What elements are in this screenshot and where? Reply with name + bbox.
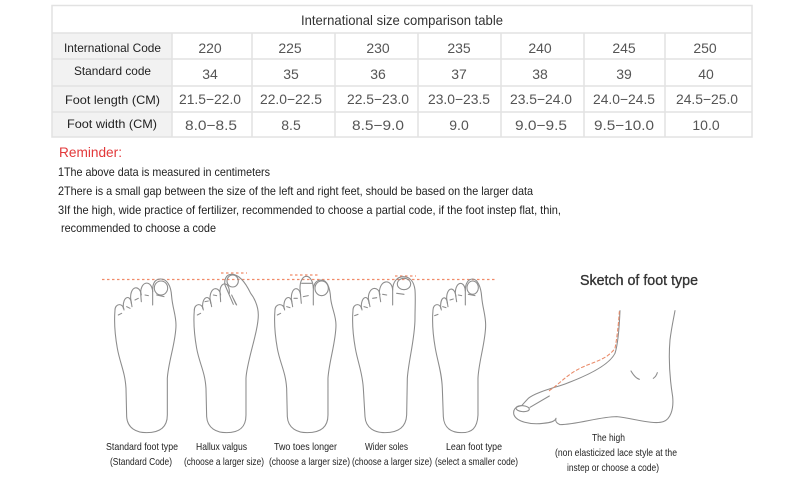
row: standard code: 34 bbox=[202, 66, 218, 82]
reminder text block: 2There is a small gap between the size of the left and right feet, should be based on the larger data bbox=[58, 184, 533, 198]
foot type captions: (Standard Code) bbox=[110, 456, 172, 468]
row: foot width bbox=[67, 117, 720, 133]
row: international code: 230 bbox=[366, 40, 390, 56]
foot type captions: Hallux valgus bbox=[196, 441, 247, 453]
row: international code bbox=[64, 40, 717, 56]
sketch heading: Sketch of foot type bbox=[580, 272, 698, 289]
row: foot width: 8.5−9.0 bbox=[352, 117, 404, 133]
sketch caption: The high bbox=[592, 432, 625, 444]
icon: standard foot bbox=[115, 279, 176, 433]
row: foot width: 8.5 bbox=[281, 117, 301, 133]
foot type captions: Lean foot type bbox=[446, 441, 502, 453]
row: foot length: 23.0−23.5 bbox=[428, 91, 490, 107]
reminder text block: 3If the high, wide practice of fertilizer, recommended to choose a partial code, if the foot instep flat, thin, bbox=[58, 203, 561, 217]
reminder text block: recommended to choose a code bbox=[61, 221, 216, 235]
row: foot length: 24.5−25.0 bbox=[676, 91, 738, 107]
row: standard code bbox=[74, 64, 714, 82]
icon: side view of high instep foot bbox=[514, 311, 675, 425]
sketch caption: instep or choose a code) bbox=[567, 462, 659, 474]
row: standard code: 38 bbox=[532, 66, 548, 82]
reference dashed line: toe length bbox=[102, 273, 495, 280]
row: foot length: Foot length (CM) bbox=[65, 93, 160, 107]
sketch caption: (non elasticized lace style at the bbox=[555, 447, 677, 459]
row: foot width: 9.0 bbox=[449, 117, 469, 133]
icon: two toes longer foot bbox=[275, 276, 336, 433]
row: international code: 250 bbox=[693, 40, 717, 56]
sketch caption bbox=[555, 432, 677, 474]
row: international code: 220 bbox=[198, 40, 222, 56]
row: international code: 225 bbox=[278, 40, 302, 56]
row: foot width: 9.5−10.0 bbox=[594, 117, 654, 133]
row: foot length: 22.0−22.5 bbox=[260, 91, 322, 107]
icon: hallux valgus foot bbox=[194, 274, 258, 433]
icon: lean foot bbox=[433, 279, 486, 433]
row: foot length: 21.5−22.0 bbox=[179, 91, 241, 107]
row: foot length bbox=[65, 91, 738, 107]
row: international code: International Code bbox=[64, 41, 161, 55]
row: international code: 235 bbox=[447, 40, 471, 56]
row: standard code: 35 bbox=[283, 66, 299, 82]
icon: wider soles foot bbox=[353, 277, 415, 433]
reminder text block: 1The above data is measured in centimeters bbox=[58, 165, 270, 179]
foot type captions: Standard foot type bbox=[106, 441, 178, 453]
row: standard code: 39 bbox=[616, 66, 632, 82]
row: standard code: Standard code bbox=[74, 64, 151, 78]
foot type captions: (choose a larger size) bbox=[269, 456, 350, 468]
row: foot width: 10.0 bbox=[692, 117, 720, 133]
foot type captions: (select a smaller code) bbox=[435, 456, 518, 468]
table title: International size comparison table bbox=[301, 12, 503, 28]
row: foot length: 24.0−24.5 bbox=[593, 91, 655, 107]
row: standard code: 37 bbox=[451, 66, 467, 82]
dashed instep line bbox=[549, 312, 619, 391]
foot type captions bbox=[106, 441, 518, 468]
row: standard code: 36 bbox=[370, 66, 386, 82]
foot type captions: Two toes longer bbox=[274, 441, 337, 453]
reminder heading: Reminder: bbox=[59, 145, 122, 160]
row: foot length: 22.5−23.0 bbox=[347, 91, 409, 107]
row: foot width: 9.0−9.5 bbox=[515, 117, 567, 133]
row: international code: 240 bbox=[528, 40, 552, 56]
row: international code: 245 bbox=[612, 40, 636, 56]
reminder text block bbox=[58, 165, 561, 235]
panel: size comparison table bbox=[52, 6, 752, 137]
foot type captions: Wider soles bbox=[365, 441, 408, 453]
row: foot width: Foot width (CM) bbox=[67, 117, 157, 131]
row: standard code: 40 bbox=[698, 66, 714, 82]
row: foot length: 23.5−24.0 bbox=[510, 91, 572, 107]
foot type captions: (choose a larger size) bbox=[184, 456, 264, 468]
foot type captions: (choose a larger size) bbox=[352, 456, 432, 468]
row: foot width: 8.0−8.5 bbox=[185, 117, 237, 133]
